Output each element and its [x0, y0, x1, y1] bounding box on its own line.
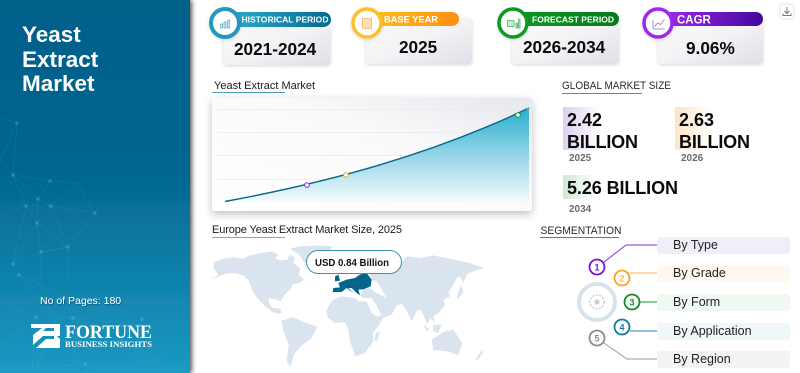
land masses — [210, 245, 484, 367]
arrow head — [525, 108, 530, 112]
icon: calendar — [362, 18, 372, 28]
icon: forecast screen — [508, 19, 520, 28]
kpi: historical period: 2021-2024 — [234, 39, 317, 59]
callout: USD 0.84 Billion — [306, 250, 402, 274]
logo: Fortune Business Insights: FORTUNE — [65, 323, 152, 343]
area under curve — [225, 108, 529, 202]
callout: USD 0.84 Billion: USD 0.84 Billion — [315, 257, 389, 269]
node 4: 4 — [619, 322, 625, 332]
network pattern — [0, 118, 160, 373]
heading: Yeast Extract Market: Yeast Extract Market — [214, 80, 315, 92]
segment: By Type: By Type — [673, 238, 718, 252]
segment: By Grade: By Grade — [673, 266, 726, 280]
stat: 2026: 2026 — [681, 153, 704, 164]
connector lines — [604, 245, 658, 359]
title: Market — [22, 71, 95, 96]
segment: By Region: By Region — [673, 352, 731, 366]
segment: By Region — [657, 351, 790, 368]
segment: By Form — [657, 294, 790, 311]
kpi: forecast period — [499, 9, 619, 64]
stat: 2025 — [563, 107, 638, 164]
heading: global market size: GLOBAL MARKET SIZE — [562, 80, 671, 92]
stat: 2026: 2.63 — [679, 110, 714, 130]
panel: left sidebar — [0, 0, 190, 373]
marker: 2034 — [516, 113, 520, 117]
stat: 2025: BILLION — [567, 132, 638, 152]
world map — [210, 245, 484, 367]
segment: By Application: By Application — [673, 324, 752, 338]
icon: bar chart — [220, 20, 230, 28]
central icon — [579, 284, 615, 320]
growth curve — [225, 108, 529, 202]
stat: 2025: 2025 — [569, 153, 592, 164]
Europe highlight — [333, 273, 372, 295]
logo: Fortune Business Insights — [31, 323, 152, 349]
kpi: base year: 2025 — [399, 37, 438, 57]
node 2: 2 — [619, 274, 625, 284]
icon: download button — [780, 4, 794, 19]
kpi: base year: BASE YEAR — [384, 14, 439, 24]
line chart: market growth — [212, 98, 532, 211]
heading: segmentation: SEGMENTATION — [540, 225, 622, 237]
page count: No of Pages: 180 — [40, 295, 121, 307]
title: Extract — [22, 47, 99, 72]
stat: 2025: 2.42 — [567, 110, 602, 130]
kpi: base year — [353, 9, 472, 64]
logo: Fortune Business Insights: BUSINESS INSIGHTS — [65, 339, 152, 349]
stat: 2026: BILLION — [679, 132, 750, 152]
stat: 2034: 2034 — [569, 204, 592, 215]
segment: By Type — [657, 237, 790, 254]
kpi: forecast period: 2026-2034 — [523, 37, 606, 57]
segment: By Grade — [657, 265, 790, 282]
segmentation diagram — [579, 245, 658, 359]
kpi: CAGR: CAGR — [677, 14, 712, 26]
kpi: forecast period: FORECAST PERIOD — [532, 14, 614, 24]
stat: 2034: 5.26 BILLION — [567, 178, 678, 198]
kpi: historical period — [211, 9, 331, 65]
stat: 2034 — [563, 175, 678, 215]
icon: growth chart — [653, 20, 665, 29]
segment: By Application — [657, 323, 790, 340]
kpi: CAGR — [644, 9, 763, 64]
kpi: historical period: HISTORICAL PERIOD — [242, 14, 328, 24]
marker: 2026 — [344, 173, 348, 177]
stat: 2026 — [675, 107, 750, 164]
node 5: 5 — [594, 334, 600, 344]
heading: Europe Yeast Extract Market Size: Europe Yeast Extract Market Size, 2025 — [212, 224, 402, 236]
kpi: CAGR: 9.06% — [686, 38, 735, 58]
title: Yeast — [22, 22, 81, 47]
node 1: 1 — [594, 262, 600, 272]
segment: By Form: By Form — [673, 295, 720, 309]
marker: 2025 — [305, 183, 309, 187]
node 3: 3 — [629, 298, 635, 308]
